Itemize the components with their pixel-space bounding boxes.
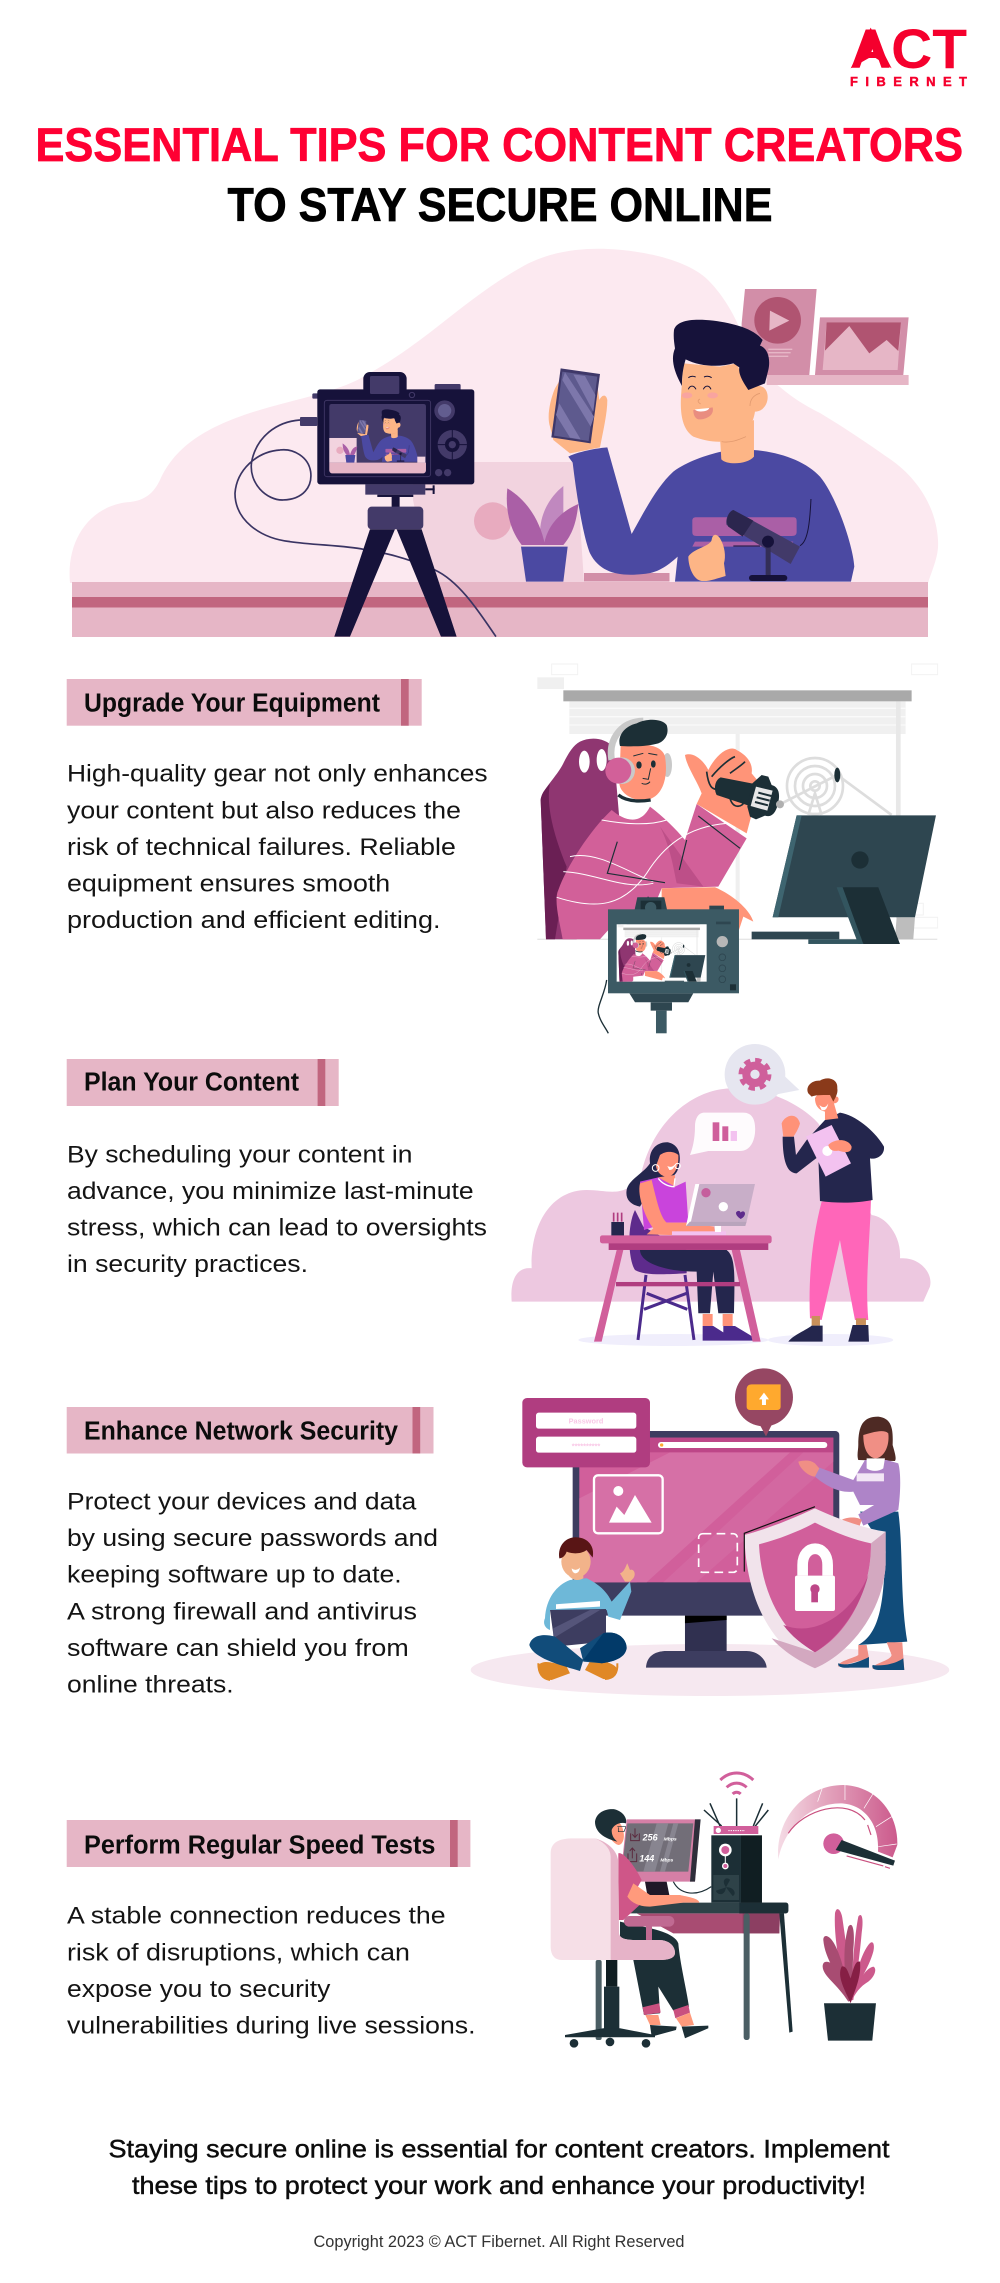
logo: ACT Fibernet: FIBERNET [850,74,967,89]
logo: ACT Fibernet: ACT [850,17,967,80]
monitor with speed readings: Mbps [660,1857,674,1863]
text: perform regular speed tests: vulnerabilities during live sessions. [67,2012,476,2040]
woman [798,1417,907,1670]
potted plant [823,1909,876,2041]
office chair [551,1838,675,2048]
text: enhance network security: software can shield you from [67,1635,409,1662]
gear bubble [725,1044,799,1105]
title: TO STAY SECURE ONLINE [228,178,772,231]
floor shadows [578,1334,893,1346]
text: perform regular speed tests: A stable connection reduces the [67,1903,446,1930]
handheld microphone [707,757,840,819]
text: enhance network security: Protect your devices and data [67,1488,417,1516]
monitor and keyboard [752,815,936,944]
window blinds [537,664,938,939]
text: plan your content: in security practices. [67,1251,308,1278]
folder pin [735,1368,793,1436]
dashed square [699,1534,737,1572]
monitor [573,1431,839,1668]
text: enhance network security: keeping software up to date. [67,1562,402,1589]
desk [623,1903,793,2040]
notebook [584,573,670,582]
password panel [522,1398,650,1467]
boy with laptop [529,1537,635,1680]
wifi signal [720,1773,753,1794]
illustration: speed test at desk [551,1773,897,2048]
title [36,118,963,231]
monitor with speed readings: 256 [642,1833,659,1843]
man with phone [549,320,854,582]
cloud background [511,1088,930,1302]
text: upgrade your equipment: risk of technical failures. Reliable [67,834,456,861]
closing message: Staying secure online is essential for content creators. Implement [108,2136,890,2164]
creator figure [557,720,760,939]
section: enhance network security heading [67,1407,433,1454]
text: upgrade your equipment: production and efficient editing. [67,907,440,934]
camera on tripod [300,372,474,637]
text: perform regular speed tests [67,1903,476,2040]
text: enhance network security: online threats. [67,1672,234,1698]
man with tablet [782,1078,884,1342]
monitor with speed readings: 144 [639,1854,654,1864]
section: enhance network security heading: Enhance Network Security [84,1418,399,1446]
section: plan your content heading [67,1059,339,1106]
text: perform regular speed tests: risk of disruptions, which can [67,1939,410,1966]
desk with laptop and pencils [594,1184,772,1342]
monitor with speed readings: Mbps [664,1836,677,1842]
monitor with speed readings [620,1819,701,1895]
chair [541,739,620,939]
shield with padlock [744,1507,886,1668]
speed gauge [778,1785,897,1868]
chart bubble [690,1113,755,1155]
text: enhance network security: A strong firewall and antivirus [67,1598,417,1625]
text: plan your content: By scheduling your content in [67,1141,413,1168]
floor ellipse [471,1644,949,1696]
image card [594,1475,663,1533]
shelf with posters [742,289,909,385]
illustration: network security monitor and shield [471,1368,949,1696]
background blob [70,249,938,583]
closing message: these tips to protect your work and enhance your productivity! [132,2172,866,2200]
panel circle [474,502,511,540]
text: enhance network security: by using secure passwords and [67,1525,438,1552]
text: upgrade your equipment: High-quality gear not only enhances [67,761,488,788]
hero illustration: creator filming with camera [70,249,938,637]
back panel [413,462,584,582]
illustration: two colleagues planning content [511,1044,930,1346]
woman at desk [626,1142,753,1341]
copyright: Copyright 2023 © ACT Fibernet. All Right Reserved [314,2233,684,2251]
table [72,582,928,637]
text: upgrade your equipment [67,761,488,934]
plant [507,486,578,582]
section: plan your content heading: Plan Your Content [84,1069,299,1097]
text: plan your content: advance, you minimize last-minute [67,1178,474,1205]
cable [235,420,496,637]
section: perform regular speed tests heading: Perform Regular Speed Tests [84,1831,435,1859]
illustration: creator with microphone and camera [537,664,938,1033]
text: enhance network security [67,1488,438,1698]
tripod camera [598,897,739,1033]
computer tower and router [673,1798,768,1903]
section: upgrade your equipment heading: Upgrade Your Equipment [84,689,380,717]
person sitting in chair [595,1809,708,2038]
antenna [780,758,892,815]
text: perform regular speed tests: expose you to security [67,1976,331,2003]
text: upgrade your equipment: equipment ensures smooth [67,870,390,897]
closing message [108,2136,890,2200]
password panel: Password [569,1417,603,1426]
text: plan your content: stress, which can lead to oversights [67,1214,487,1242]
text: plan your content [67,1141,487,1278]
section: perform regular speed tests heading [67,1820,470,1867]
password panel: ********** [572,1441,600,1450]
section: upgrade your equipment heading [67,679,422,726]
text: upgrade your equipment: your content but also reduces the [67,797,461,824]
